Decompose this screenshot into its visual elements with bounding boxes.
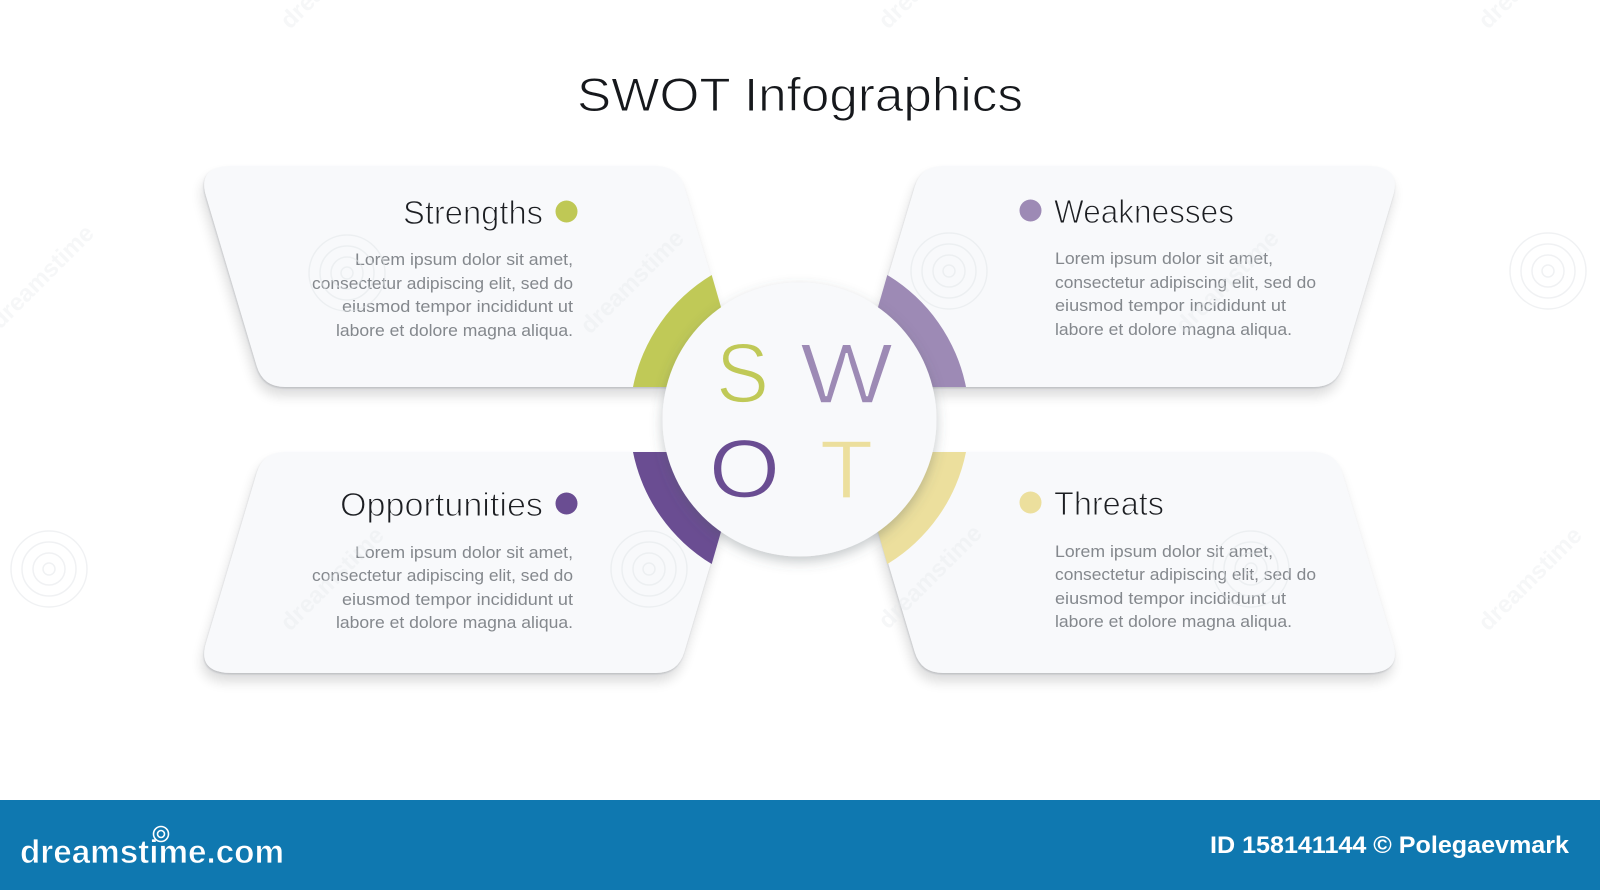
letter T: T [820,423,873,516]
body text: threats: eiusmod tempor incididunt ut [1055,589,1286,608]
letter S: S [716,326,769,420]
footer bar [0,800,1600,890]
ring segment: strengths [633,275,744,387]
body text: strengths: consectetur adipiscing elit, sed do [312,274,573,293]
panel: opportunities [204,452,744,673]
body text: weaknesses: consectetur adipiscing elit, sed do [1055,273,1316,292]
body text: strengths [312,250,573,340]
dot: threats [1020,492,1042,514]
card: weaknesses [860,166,1395,387]
heading: strengths: Strengths [403,194,543,231]
body text: weaknesses: eiusmod tempor incididunt ut [1055,296,1286,315]
body text: opportunities: eiusmod tempor incididunt ut [342,590,573,609]
footer background [0,800,1600,890]
logo wordmark: dreamstime.com [20,833,284,870]
panel: weaknesses [855,166,1395,387]
watermark pattern: dreamstime [1170,225,1285,339]
body text: opportunities: consectetur adipiscing elit, sed do [312,566,573,585]
heading: weaknesses: Weaknesses [1054,193,1234,230]
body text: weaknesses: labore et dolore magna aliqua. [1055,320,1292,339]
body text: strengths: Lorem ipsum dolor sit amet, [355,250,573,269]
body text: threats: Lorem ipsum dolor sit amet, [1055,542,1273,561]
hub disc [662,282,936,556]
watermark pattern: dreamstime [1473,522,1588,636]
body text: opportunities: labore et dolore magna aliqua. [336,613,573,632]
ring segment: opportunities [633,452,744,564]
panel: threats [855,452,1395,673]
title: SWOT Infographics [577,68,1023,121]
body text: threats [1055,542,1316,631]
body text: threats: labore et dolore magna aliqua. [1055,612,1292,631]
image id and credit: ID 158141144 © Polegaevmark [1210,832,1570,859]
watermark pattern: dreamstime [275,522,390,636]
letter W: W [800,327,893,422]
central SWOT circle [662,282,936,556]
card: strengths [204,166,739,387]
dot: opportunities [556,492,578,514]
card: threats [860,452,1395,673]
watermark pattern: dreamstime [575,225,690,339]
logo spiral icon [154,826,168,842]
body text: weaknesses: Lorem ipsum dolor sit amet, [1055,249,1273,268]
body text: opportunities [312,543,573,632]
dot: strengths [556,200,578,222]
heading: threats: Threats [1054,485,1164,522]
body text: strengths: labore et dolore magna aliqua. [336,321,573,340]
panel: strengths [204,166,744,387]
body text: threats: consectetur adipiscing elit, sed do [1055,565,1316,584]
body text: weaknesses [1055,249,1316,339]
watermark pattern: dreamstime [873,520,988,634]
body text: strengths: eiusmod tempor incididunt ut [342,297,573,316]
letter O: O [709,422,780,515]
ring segment: weaknesses [855,275,966,387]
watermark pattern [0,0,1588,636]
dot: weaknesses [1020,200,1042,222]
ring segment: threats [855,452,966,564]
card: opportunities [204,452,739,673]
body text: opportunities: Lorem ipsum dolor sit amet, [355,543,573,562]
heading: opportunities: Opportunities [340,486,543,523]
